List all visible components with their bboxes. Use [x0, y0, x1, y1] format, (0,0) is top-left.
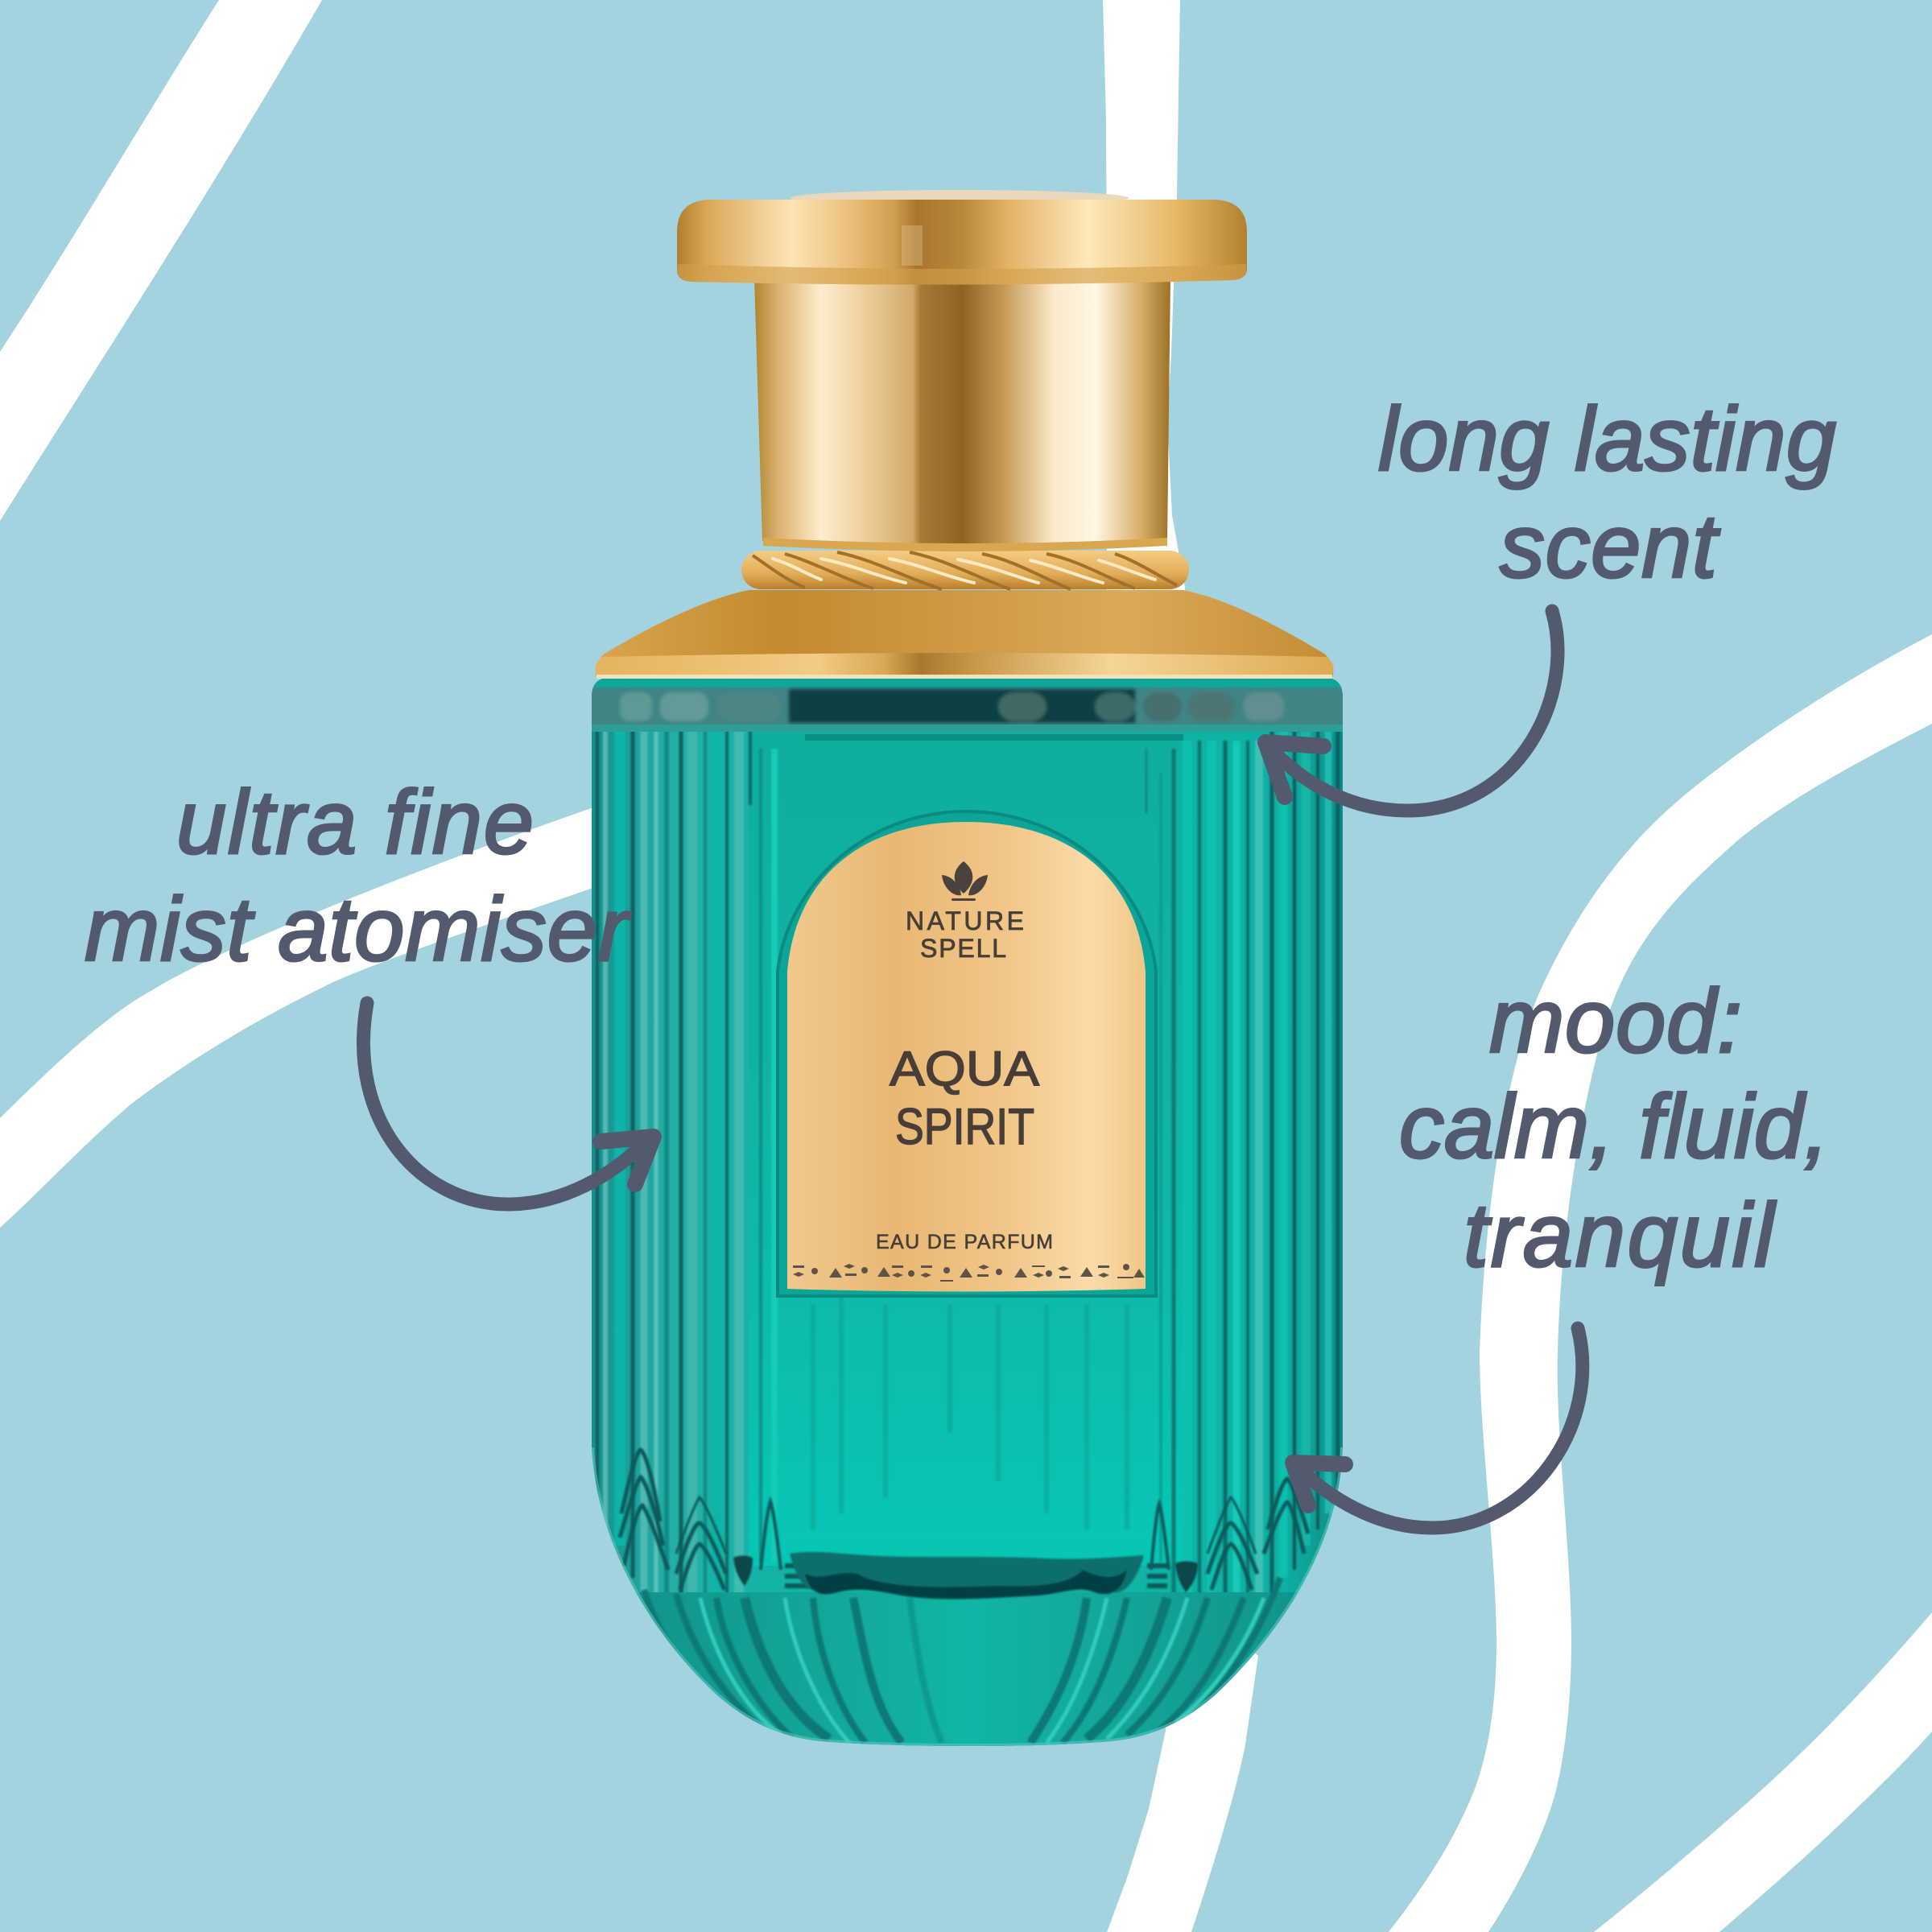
bottom fan reflections: [592, 1447, 1343, 1751]
top dark band: [588, 678, 1348, 741]
gold shoulder collar: [596, 590, 1333, 679]
callout: ultra fine mist atomiser: ultra fine: [176, 772, 534, 873]
brand name: SPELL: [920, 934, 1006, 963]
arrow: mood: [1293, 1328, 1583, 1528]
callout: ultra fine mist atomiser: mist atomiser: [85, 879, 632, 980]
perfume bottle: [588, 190, 1348, 1751]
gold neck cylinder: [754, 278, 1170, 551]
callout: mood: mood:: [1489, 971, 1742, 1071]
left flutes: [597, 692, 774, 1602]
product name: AQUA: [890, 1042, 1039, 1096]
callout: mood: [1399, 971, 1829, 1286]
twisted rope ring: [741, 551, 1189, 589]
central streaks: [813, 1296, 1127, 1530]
gold cap: [677, 190, 1247, 285]
callout: long lasting scent: scent: [1500, 496, 1720, 597]
brand name: NATURE: [906, 906, 1024, 935]
callout: long lasting scent: long lasting: [1378, 389, 1836, 489]
glass rim highlight: [592, 1447, 1343, 1746]
eau de parfum: EAU DE PARFUM: [876, 1231, 1053, 1253]
dark wavy liquid line: [733, 1552, 1198, 1599]
callout: long lasting scent: [1378, 389, 1836, 597]
product name: SPIRIT: [895, 1099, 1034, 1155]
logo leaves icon: [942, 861, 988, 901]
central glass panel: [749, 729, 1183, 1566]
side chevrons: [620, 1450, 1308, 1590]
gold label: [787, 822, 1146, 1291]
decorative pattern row: [793, 1264, 1145, 1282]
callout: mood: calm, fluid,: [1399, 1076, 1829, 1177]
product name: [890, 1042, 1039, 1155]
right flutes: [1146, 692, 1338, 1602]
brand name: [906, 906, 1024, 963]
label recess outline: [778, 811, 1156, 1296]
bottle glass body: [588, 676, 1348, 1751]
callout: ultra fine mist atomiser: [85, 772, 632, 980]
arrow: mist atomiser: [363, 1003, 654, 1204]
arrow: long lasting scent: [1265, 611, 1558, 811]
callout: mood: tranquil: [1463, 1185, 1777, 1286]
